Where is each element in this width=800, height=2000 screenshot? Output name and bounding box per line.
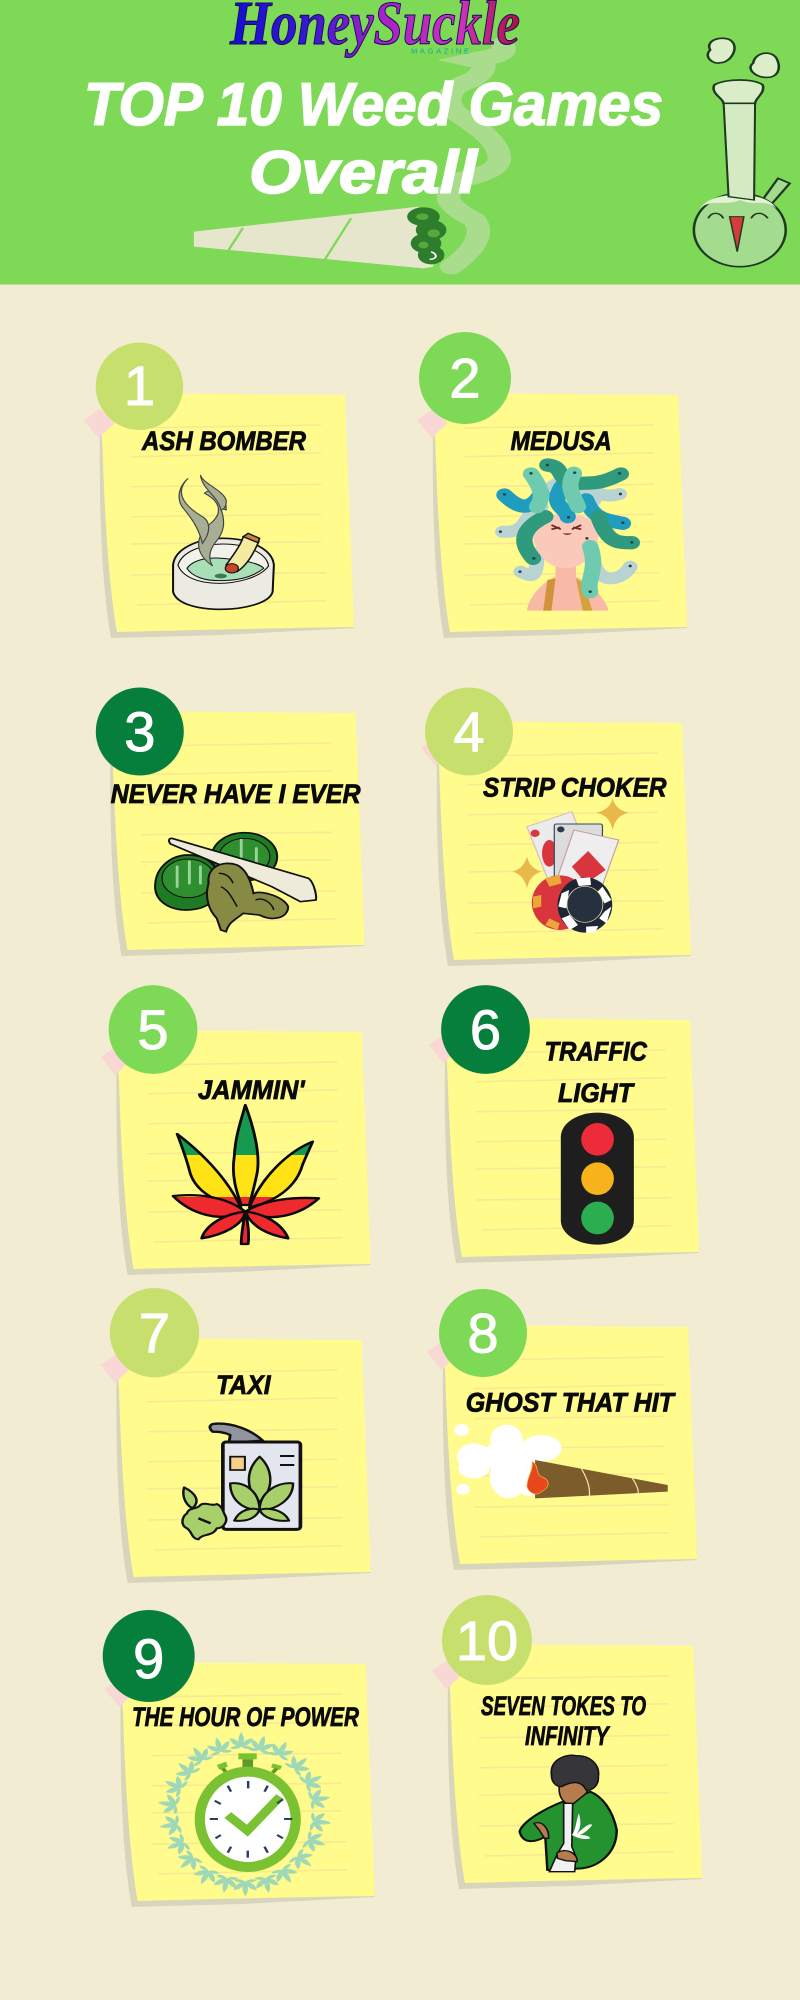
card 8: ghost that hit bbox=[427, 1289, 697, 1570]
card 7: taxi bbox=[101, 1288, 371, 1583]
heading: LIGHT bbox=[558, 1078, 635, 1108]
badge 8 bbox=[439, 1289, 527, 1377]
badge 1: 1 bbox=[124, 354, 155, 417]
icon: ashtray bbox=[173, 475, 274, 609]
badge 9 bbox=[103, 1610, 195, 1702]
heading: THE HOUR OF POWER bbox=[132, 1702, 359, 1732]
heading: TRAFFIC bbox=[544, 1036, 647, 1066]
badge 6: 6 bbox=[470, 998, 501, 1061]
icon: rising smoke bbox=[448, 45, 504, 267]
title bbox=[84, 71, 663, 206]
badge 7 bbox=[110, 1288, 199, 1377]
badge 10 bbox=[442, 1595, 532, 1685]
card 5: jammin' bbox=[101, 985, 371, 1275]
heading: STRIP CHOKER bbox=[483, 772, 667, 802]
badge 10: 10 bbox=[456, 1609, 518, 1672]
heading: GHOST THAT HIT bbox=[466, 1388, 676, 1418]
icon: vape machine and bud bbox=[182, 1424, 300, 1539]
badge 2: 2 bbox=[449, 346, 481, 410]
badge 3: 3 bbox=[124, 700, 155, 763]
badge 5: 5 bbox=[137, 998, 169, 1061]
title: Overall bbox=[249, 139, 478, 206]
badge 7: 7 bbox=[139, 1301, 170, 1364]
icon: stopwatch with leaf wreath bbox=[156, 1732, 333, 1896]
heading: MEDUSA bbox=[511, 426, 612, 456]
title: TOP 10 Weed Games bbox=[84, 71, 663, 138]
card 10: seven tokes to infinity bbox=[432, 1595, 702, 1889]
heading: JAMMIN' bbox=[198, 1075, 306, 1105]
heading: INFINITY bbox=[525, 1721, 611, 1751]
badge 2 bbox=[419, 332, 511, 424]
heading: ASH BOMBER bbox=[141, 426, 306, 456]
icon: joint bbox=[194, 207, 446, 268]
icon: laughing bong with smoke puffs bbox=[694, 38, 790, 267]
heading bbox=[481, 1691, 646, 1751]
heading: NEVER HAVE I EVER bbox=[111, 779, 361, 809]
icon: grinder, joint and buds bbox=[155, 833, 316, 932]
heading: SEVEN TOKES TO bbox=[481, 1691, 646, 1721]
card 2: medusa bbox=[417, 332, 687, 638]
heading: TAXI bbox=[216, 1370, 271, 1400]
card 9: the hour of power bbox=[103, 1610, 375, 1907]
card 3: never have i ever bbox=[94, 688, 364, 956]
badge 9: 9 bbox=[133, 1627, 164, 1690]
heading bbox=[544, 1036, 647, 1108]
icon: traffic light bbox=[561, 1113, 634, 1245]
badge 8: 8 bbox=[467, 1302, 499, 1364]
icon: person with bong bbox=[520, 1755, 617, 1872]
card 6: traffic light bbox=[429, 985, 699, 1263]
header banner bbox=[0, 0, 800, 284]
icon: rasta cannabis leaf bbox=[173, 1105, 319, 1244]
badge 5 bbox=[109, 985, 197, 1074]
badge 1 bbox=[96, 343, 183, 430]
badge 4 bbox=[425, 688, 513, 776]
logo: MAGAZINE bbox=[411, 46, 469, 56]
icon: cards and chips bbox=[513, 798, 629, 933]
icon: medusa bbox=[499, 464, 633, 611]
icon: blunt with smoke bbox=[454, 1424, 668, 1498]
card 4: strip choker bbox=[421, 688, 691, 966]
badge 3 bbox=[96, 688, 184, 776]
card 1: ash bomber bbox=[84, 343, 354, 638]
badge 6 bbox=[441, 985, 530, 1074]
badge 4: 4 bbox=[453, 700, 485, 763]
